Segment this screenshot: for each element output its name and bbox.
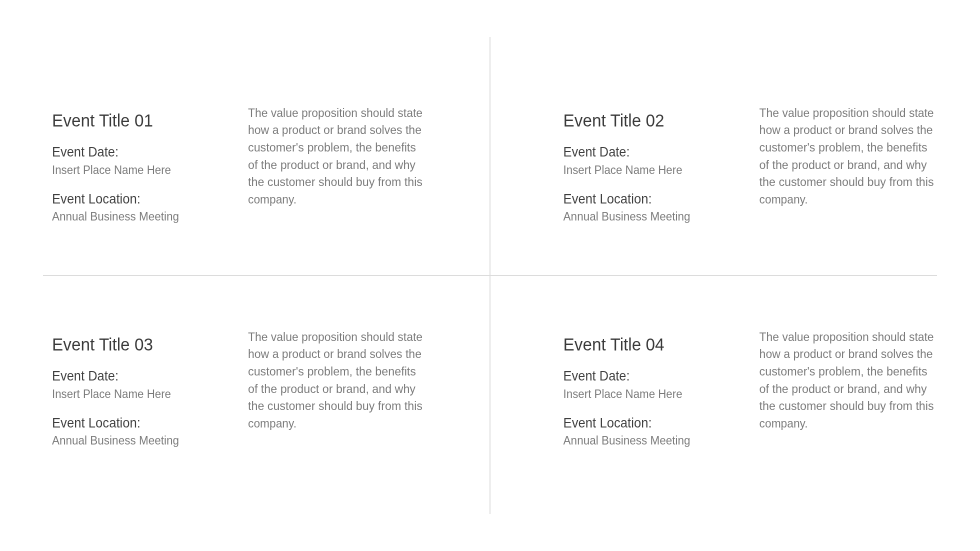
text block: value proposition: of the product or brand, and why — [759, 158, 928, 172]
text block: value proposition: the customer should buy from this — [248, 399, 422, 413]
text block: value proposition — [759, 106, 934, 206]
heading: event title 02: Event Title 02 — [563, 110, 664, 130]
text block: value proposition: how a product or brand solves the — [759, 123, 933, 137]
text: place name: Insert Place Name Here — [563, 387, 682, 401]
text block: value proposition: of the product or brand, and why — [759, 382, 928, 396]
heading: event title 01: Event Title 01 — [52, 110, 153, 130]
text block: value proposition: The value proposition should state — [759, 106, 934, 120]
label: event date: Event Date: — [52, 368, 118, 384]
text block: value proposition: of the product or brand, and why — [248, 382, 416, 396]
label: event location: Event Location: — [52, 192, 140, 206]
panel: event 02 — [563, 106, 934, 224]
text: meeting name: Annual Business Meeting — [563, 434, 690, 448]
text block: value proposition: customer's problem, the benefits — [759, 140, 927, 154]
label: event location: Event Location: — [563, 192, 652, 206]
text block: value proposition: company. — [759, 192, 808, 206]
text block: value proposition: the customer should buy from this — [759, 399, 934, 413]
label: event location: Event Location: — [52, 416, 140, 430]
text block: value proposition — [759, 330, 934, 430]
text block: value proposition: The value proposition should state — [759, 330, 934, 344]
text block: value proposition: customer's problem, the benefits — [248, 140, 416, 154]
text block: value proposition: company. — [248, 416, 296, 430]
text: meeting name: Annual Business Meeting — [52, 210, 179, 224]
text: meeting name: Annual Business Meeting — [563, 210, 690, 224]
panel: event 03 — [52, 330, 423, 448]
text block: value proposition: how a product or brand solves the — [248, 347, 422, 361]
text block: value proposition: the customer should buy from this — [759, 175, 934, 189]
panel: event 01 — [52, 106, 423, 224]
text: place name: Insert Place Name Here — [563, 163, 682, 177]
panel: event 04 — [563, 330, 934, 448]
text block: value proposition: customer's problem, the benefits — [248, 364, 416, 378]
label: event location: Event Location: — [563, 416, 652, 430]
label: event date: Event Date: — [563, 368, 630, 384]
heading: event title 04: Event Title 04 — [563, 334, 665, 354]
text block: value proposition: The value proposition should state — [248, 330, 423, 344]
heading: event title 03: Event Title 03 — [52, 334, 153, 354]
text block: value proposition: the customer should buy from this — [248, 175, 422, 189]
text block: value proposition — [248, 330, 423, 430]
text block: value proposition: company. — [248, 192, 296, 206]
text block: value proposition: how a product or brand solves the — [248, 123, 422, 137]
text: place name: Insert Place Name Here — [52, 163, 171, 177]
text: meeting name: Annual Business Meeting — [52, 434, 179, 448]
text block: value proposition — [248, 106, 423, 206]
text block: value proposition: of the product or brand, and why — [248, 158, 416, 172]
text block: value proposition: how a product or brand solves the — [759, 347, 933, 361]
text block: value proposition: The value proposition should state — [248, 106, 423, 120]
text block: value proposition: customer's problem, the benefits — [759, 364, 927, 378]
text block: value proposition: company. — [759, 416, 808, 430]
label: event date: Event Date: — [52, 144, 118, 160]
text: place name: Insert Place Name Here — [52, 387, 171, 401]
label: event date: Event Date: — [563, 144, 630, 160]
